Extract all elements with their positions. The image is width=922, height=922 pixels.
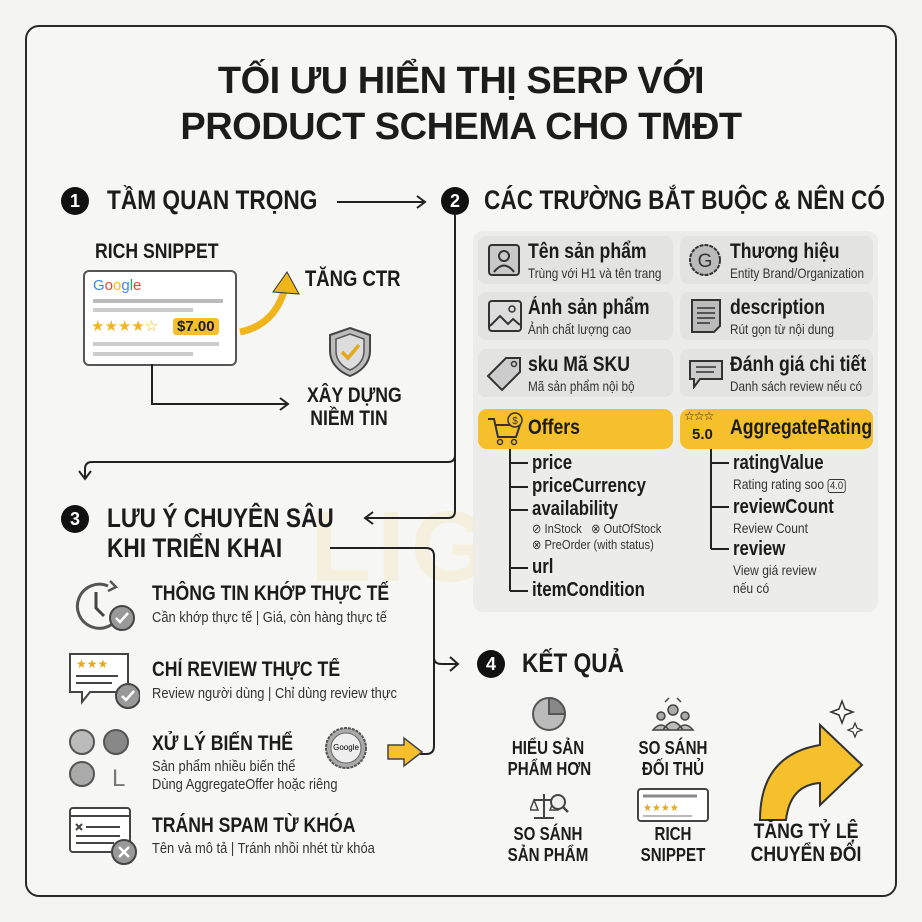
- rich snippet card: ★★★★☆: [91, 318, 158, 335]
- field: brand: Entity Brand/Organization: [730, 265, 864, 281]
- text: build trust: XÂY DỰNG: [307, 384, 402, 407]
- section 3 heading: LƯU Ý CHUYÊN SÂU: [107, 503, 334, 533]
- field: product name: Trùng với H1 và tên trang: [528, 265, 661, 281]
- text: build trust: [307, 383, 402, 430]
- connector: 3 to 4: [330, 547, 460, 755]
- section 4 heading: KẾT QUẢ: [522, 648, 624, 678]
- item: avoid spam: Tên và mô tả | Tránh nhồi nhét từ khóa: [152, 840, 375, 857]
- result: understand product: [508, 697, 591, 779]
- title: [180, 58, 742, 148]
- offers tree: ⊗ PreOrder (with status): [532, 537, 654, 552]
- big arrow: conversion: [759, 699, 864, 821]
- offers tree: url: [532, 556, 553, 578]
- result: compare products: [508, 794, 588, 865]
- field: review: Danh sách review nếu có: [730, 378, 862, 394]
- item: variants: Dùng AggregateOffer hoặc riêng: [152, 776, 338, 793]
- section 1 heading: 1: [70, 191, 80, 211]
- arrow: up to CTR: [239, 271, 300, 336]
- title: PRODUCT SCHEMA CHO TMĐT: [180, 106, 742, 148]
- section 3 heading: [61, 502, 334, 563]
- offers header: Offers: [528, 416, 580, 439]
- result: compare products: SẢN PHẨM: [508, 845, 588, 865]
- panel: fields: [473, 231, 878, 612]
- connector: card to trust: [151, 364, 290, 411]
- result: rich snippet: RICH: [655, 824, 691, 844]
- connector: 2 to 3: [78, 215, 456, 525]
- field: product name: [478, 236, 673, 284]
- item: real reviews: ★★★: [76, 657, 108, 671]
- field: sku: sku Mã SKU: [528, 353, 630, 376]
- offers tree: availability: [532, 498, 618, 520]
- result: compare competitors: SO SÁNH: [639, 738, 707, 758]
- field: review: [680, 349, 873, 397]
- field: description: description: [730, 296, 825, 319]
- result: compare competitors: ĐỐI THỦ: [642, 759, 704, 779]
- icon: shield: [329, 327, 371, 378]
- field: brand: Thương hiệu: [730, 240, 840, 263]
- rating tree: Rating rating soo 4.0: [733, 476, 843, 492]
- icon: google badge: [325, 727, 367, 769]
- field: image: [478, 292, 673, 340]
- section 2 heading: CÁC TRƯỜNG BẮT BUỘC & NÊN CÓ: [484, 185, 885, 215]
- arrow 1 to 2: [337, 195, 426, 209]
- rich snippet card: Google: [93, 277, 141, 294]
- offers tree: [509, 449, 662, 601]
- item: variants: L: [112, 765, 125, 792]
- offers header: $: [512, 416, 518, 427]
- arrow: yellow to results: [387, 736, 424, 768]
- rating tree: View giá review: [733, 562, 816, 578]
- result: rich snippet: [637, 788, 709, 865]
- section 3 heading: 3: [70, 509, 80, 529]
- rich snippet card: $7.00: [177, 318, 215, 335]
- result: compare competitors: [639, 698, 707, 779]
- rating tree: [710, 449, 846, 596]
- title: TỐI ƯU HIỂN THỊ SERP VỚI: [218, 60, 704, 102]
- rating tree: nếu có: [733, 580, 769, 596]
- aggregate rating header: 5.0: [692, 426, 713, 443]
- rating tree: Review Count: [733, 520, 808, 536]
- field: product name: Tên sản phẩm: [528, 240, 647, 263]
- section 3 heading: KHI TRIỂN KHAI: [107, 533, 282, 563]
- result: rich snippet: ★★★★: [643, 803, 679, 814]
- item: variants: XỬ LÝ BIẾN THỂ: [152, 732, 293, 755]
- aggregate rating header: [680, 409, 873, 449]
- field: sku: [478, 349, 673, 397]
- field: image: Ảnh sản phẩm: [528, 296, 650, 319]
- field: description: [680, 292, 873, 340]
- item: variants: Sản phẩm nhiều biến thể: [152, 758, 295, 775]
- offers tree: ⊘ InStock ⊗ OutOfStock: [532, 521, 661, 536]
- offers tree: priceCurrency: [532, 475, 646, 497]
- field: review: Đánh giá chi tiết: [730, 353, 866, 376]
- item: real reviews: CHỈ REVIEW THỰC TẾ: [152, 658, 340, 681]
- result: rich snippet: SNIPPET: [641, 845, 705, 865]
- rating tree: review: [733, 538, 785, 560]
- text: tăng CTR: TĂNG CTR: [305, 266, 400, 291]
- item: avoid spam: [69, 807, 375, 865]
- item: matching info: THÔNG TIN KHỚP THỰC TẾ: [152, 582, 389, 605]
- rating tree: reviewCount: [733, 496, 834, 518]
- text: increase conversion: CHUYỂN ĐỔI: [751, 843, 861, 866]
- item: real reviews: Review người dùng | Chỉ dùng review thực: [152, 685, 397, 702]
- item: matching info: [76, 580, 389, 631]
- offers tree: price: [532, 452, 572, 474]
- item: real reviews: [69, 653, 397, 709]
- icon: google badge: Google: [333, 743, 359, 752]
- result: compare products: SO SÁNH: [514, 824, 582, 844]
- field: description: Rút gọn từ nội dung: [730, 321, 834, 337]
- text: increase conversion: [751, 819, 861, 866]
- section 4 heading: 4: [486, 654, 496, 674]
- aggregate rating header: ☆☆☆: [684, 409, 713, 423]
- field: brand: [680, 236, 873, 284]
- rich snippet card: [83, 270, 237, 366]
- item: variants: [69, 727, 367, 793]
- offers tree: itemCondition: [532, 579, 645, 601]
- watermark: LIGHT: [310, 491, 640, 603]
- text: increase conversion: TĂNG TỶ LỆ: [754, 820, 858, 843]
- offers header: [478, 409, 673, 449]
- item: matching info: Cần khớp thực tế | Giá, còn hàng thực tế: [152, 609, 387, 626]
- rating tree: ratingValue: [733, 452, 824, 474]
- rich snippet label: RICH SNIPPET: [95, 240, 219, 263]
- field: sku: Mã sản phẩm nội bộ: [528, 378, 635, 394]
- result: understand product: HIỂU SẢN: [512, 738, 584, 758]
- field: brand: G: [698, 251, 712, 272]
- item: avoid spam: TRÁNH SPAM TỪ KHÓA: [152, 814, 355, 837]
- section 1 heading: TẦM QUAN TRỌNG: [107, 185, 317, 215]
- aggregate rating header: AggregateRating: [730, 416, 872, 439]
- field: image: Ảnh chất lượng cao: [528, 321, 631, 337]
- section 2 heading: 2: [450, 191, 460, 211]
- result: understand product: PHẨM HƠN: [508, 759, 591, 779]
- section 4 heading: [477, 648, 624, 678]
- text: build trust: NIỀM TIN: [310, 407, 388, 430]
